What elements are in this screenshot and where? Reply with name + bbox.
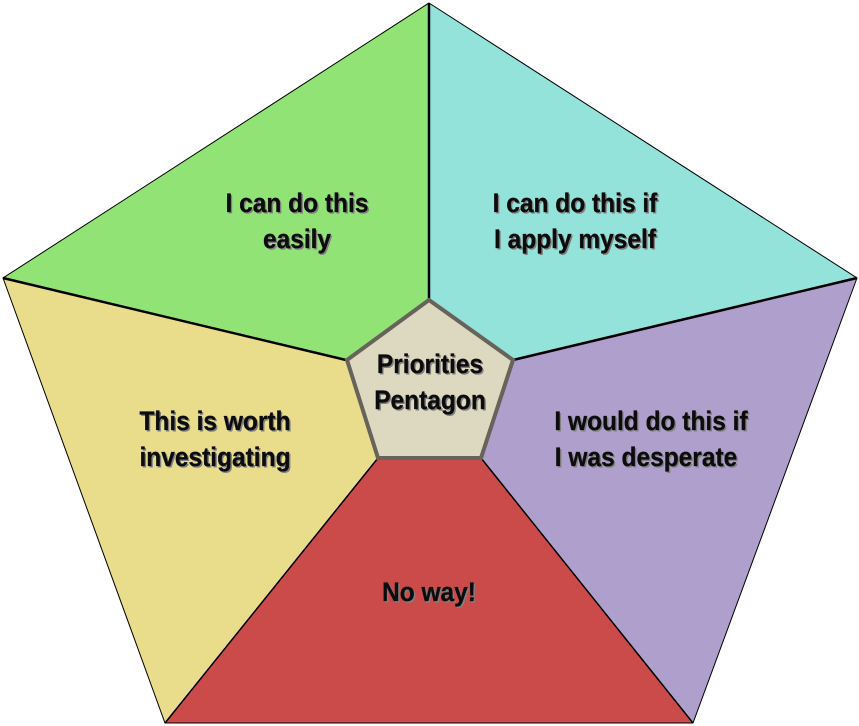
panel: This is worth investigating: investigating [141, 444, 292, 474]
panel: I would do this if I was desperate: I would do this if [554, 407, 748, 436]
center pentagon: Priorities Pentagon: Pentagon [374, 386, 486, 415]
panel: I can do this easily: easily [263, 225, 332, 254]
panel: I can do this easily: I can do this [227, 190, 370, 220]
panel: I can do this if I apply myself [429, 3, 857, 360]
panel: No way!: No way! [384, 579, 477, 609]
panel: No way!: No way! [382, 578, 476, 607]
panel: I would do this if I was desperate: I would do this if [556, 408, 750, 438]
panel: I would do this if I was desperate [481, 278, 857, 723]
panel: I can do this easily [3, 3, 429, 360]
center pentagon: Priorities Pentagon [347, 300, 513, 458]
panel: No way! [165, 458, 693, 723]
panel: This is worth investigating: investigating [139, 443, 291, 472]
panel: I can do this if I apply myself: I can do this if [493, 189, 658, 218]
panel: This is worth investigating: This is worth [141, 408, 292, 438]
panel: I can do this easily: I can do this [226, 189, 368, 218]
panel: I would do this if I was desperate: I was desperate [556, 444, 739, 474]
panel: I can do this easily: easily [264, 226, 333, 256]
center pentagon: Priorities Pentagon: Pentagon [376, 387, 487, 417]
panel: I would do this if I was desperate: I was desperate [555, 443, 737, 472]
center pentagon: Priorities Pentagon: Priorities [377, 350, 483, 379]
center pentagon: Priorities Pentagon: Priorities [378, 351, 485, 381]
panel: I can do this if I apply myself: I apply myself [495, 226, 658, 256]
panel: I can do this if I apply myself: I can do this if [494, 190, 659, 220]
panel: I can do this if I apply myself: I apply myself [494, 225, 656, 254]
panel: This is worth investigating: This is worth [139, 407, 291, 436]
panel: This is worth investigating [3, 278, 378, 723]
